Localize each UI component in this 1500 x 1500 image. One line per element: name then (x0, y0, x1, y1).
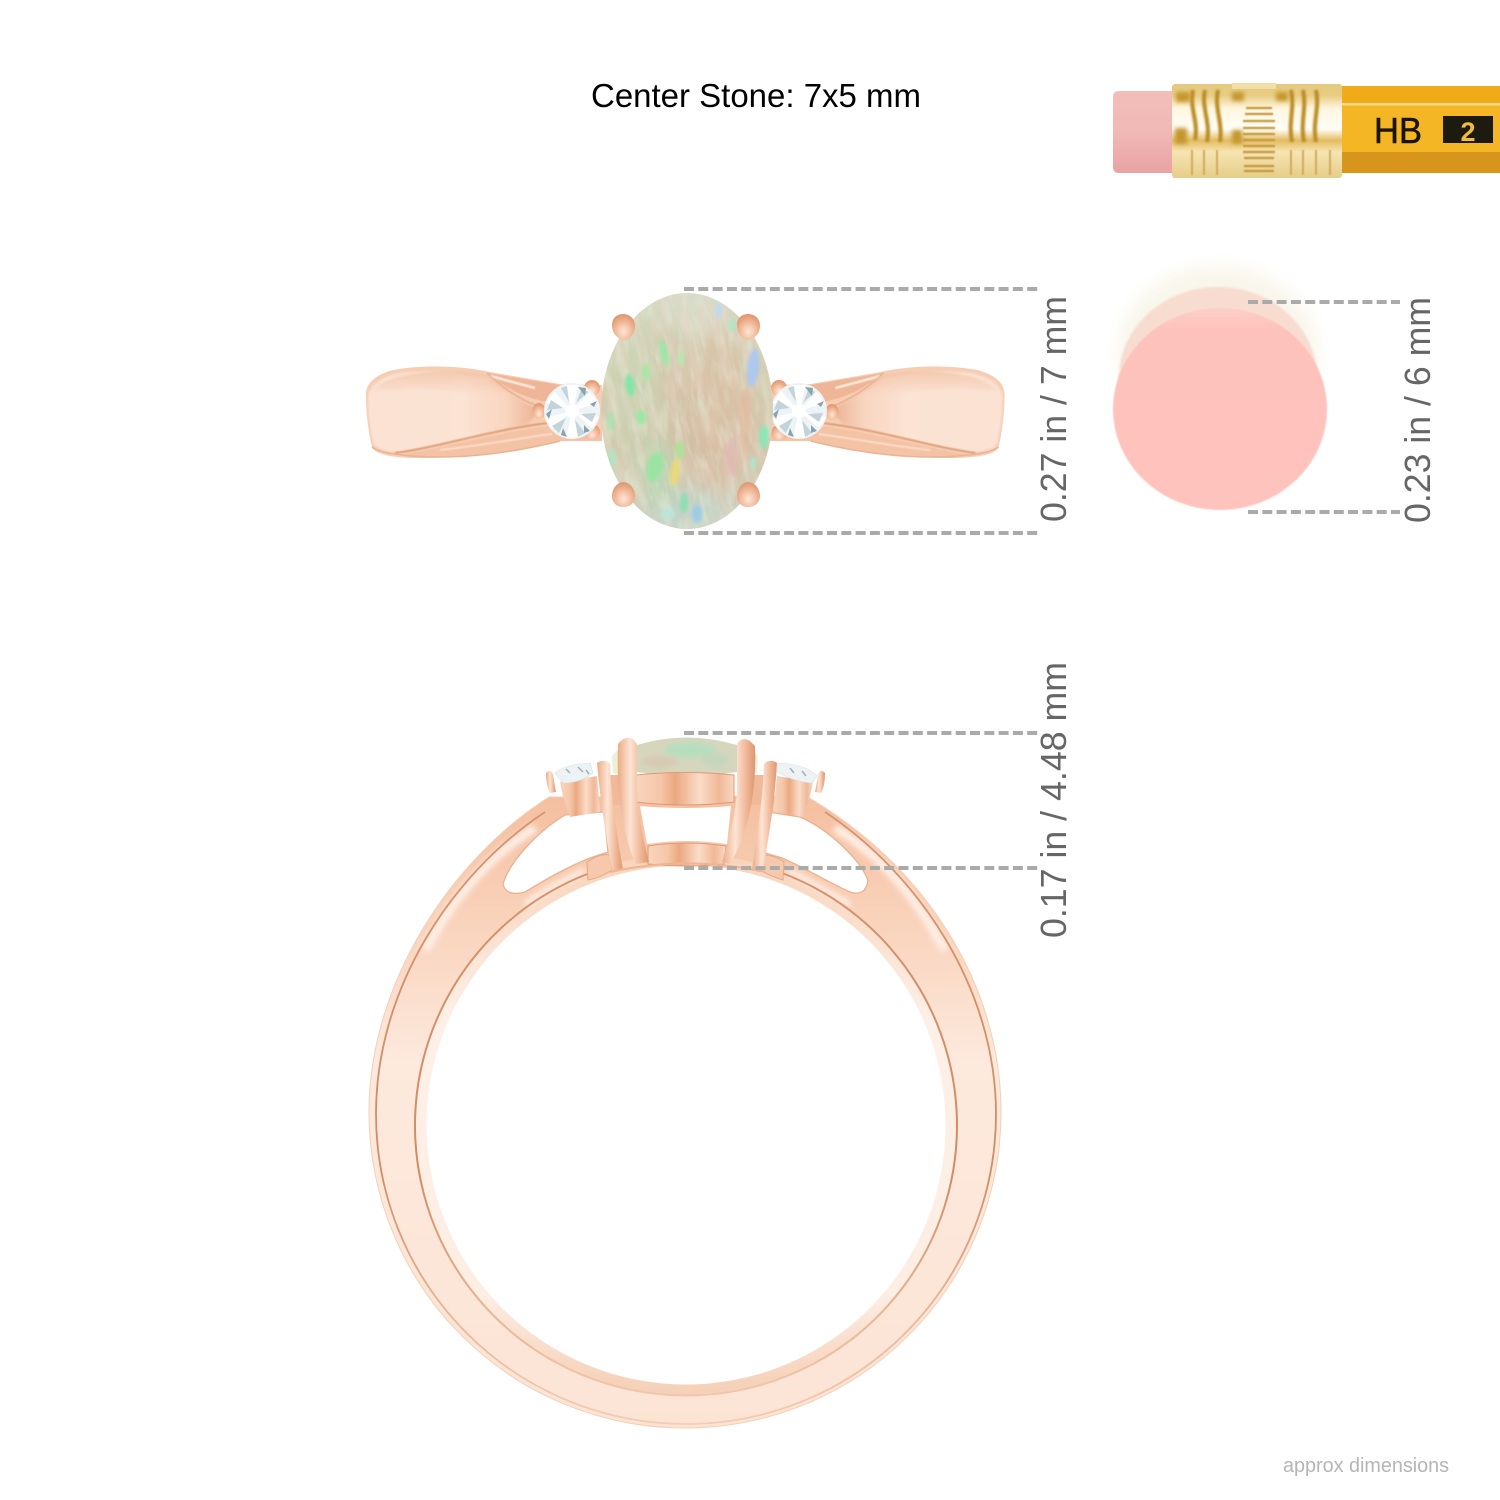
right tapered band (768, 366, 1005, 458)
left center prong (618, 738, 649, 864)
left side diamond (544, 383, 600, 439)
lower shoulder blocks (587, 855, 784, 880)
eraser top view (1113, 266, 1327, 510)
inner rim (421, 860, 951, 1390)
pencil eraser (1113, 91, 1174, 173)
center stone prongs (612, 314, 760, 507)
outer groove line (376, 812, 996, 1424)
pencil ferrule (1172, 83, 1342, 178)
dimension lines: side view (684, 733, 1040, 868)
left side stone head (546, 763, 600, 817)
upper stone cradle (636, 772, 734, 805)
pencil label 2 (1443, 116, 1493, 147)
ferrule halo (1118, 266, 1318, 438)
eraser face (1113, 308, 1327, 510)
dimension lines: eraser (1248, 302, 1400, 512)
dimension label: front view: 0.27 in / 7 mm (1033, 296, 1074, 522)
title: Center Stone: 7x5 mm (591, 77, 921, 114)
lower stone cradle (648, 843, 726, 866)
right side stone head (773, 763, 825, 817)
pencil label 2: 2 (1460, 117, 1476, 147)
ring front view (366, 245, 1005, 573)
inner groove line (415, 873, 957, 1395)
right center prong (722, 739, 755, 864)
center prong gap (640, 806, 731, 844)
pencil body (1340, 86, 1500, 173)
ring side view (369, 738, 1001, 1428)
center opal side (612, 738, 758, 776)
eraser rear rim (1119, 287, 1317, 469)
band seat arc (610, 864, 765, 872)
right side diamond (771, 383, 827, 439)
band body (369, 796, 1001, 1428)
pencil label HB: HB (1374, 110, 1422, 151)
side stone prongs (532, 380, 838, 441)
dimension label: eraser: 0.23 in / 6 mm (1397, 297, 1438, 523)
center opal (601, 293, 773, 529)
side stone long prongs (597, 761, 777, 870)
footnote: approx dimensions (1283, 1455, 1449, 1477)
shoulder highlights (425, 828, 945, 950)
band opening (426, 866, 946, 1384)
left shoulder opening (503, 812, 608, 893)
icon: pencil scale reference (1113, 83, 1500, 178)
left tapered band (366, 366, 602, 458)
dimension lines: front view (684, 289, 1040, 533)
right shoulder opening (762, 812, 868, 893)
dimension label: side view: 0.17 in / 4.48 mm (1033, 662, 1074, 938)
prong connector blocks (606, 775, 764, 805)
